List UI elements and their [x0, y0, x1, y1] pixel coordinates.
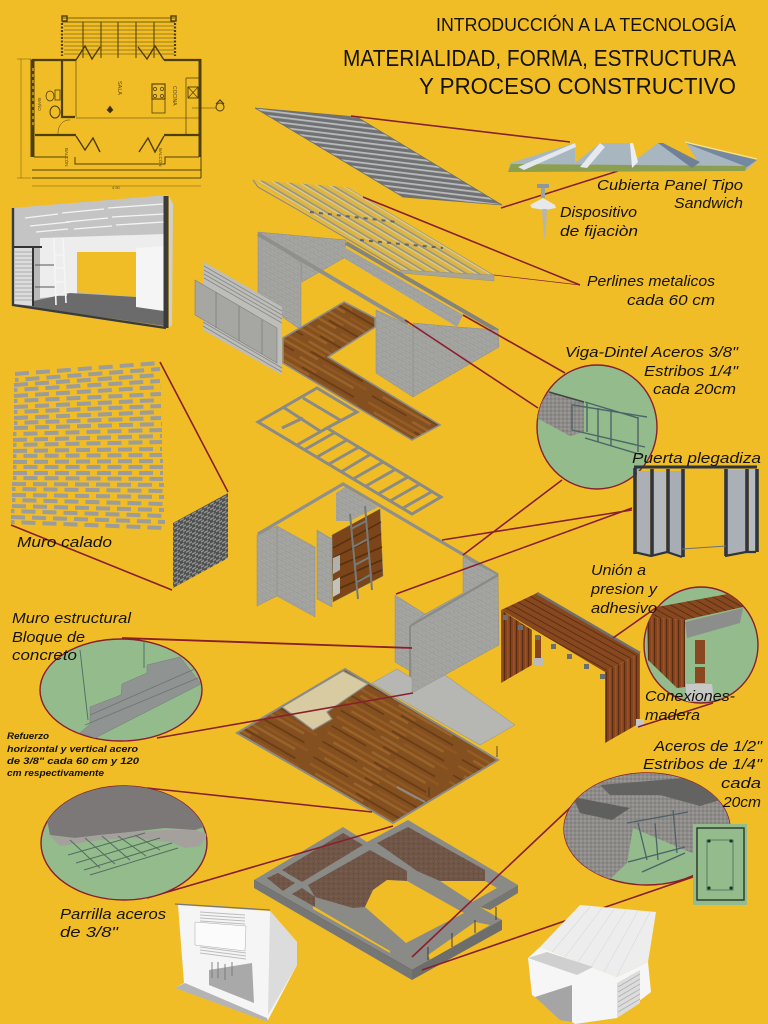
white house back view	[528, 905, 656, 1024]
label: conexiones madera: madera	[645, 707, 700, 724]
foundation openings	[365, 880, 464, 943]
parrilla magnifier	[40, 785, 210, 900]
white house front view	[175, 904, 297, 1022]
label: viga dintel: Viga-Dintel Aceros 3/8"	[565, 344, 739, 361]
label: refuerzo: cm respectivamente	[7, 768, 105, 779]
upper walls with shelves and ladder	[257, 484, 498, 617]
label: muro estructural: concreto	[12, 647, 77, 664]
course title: INTRODUCCIÓN A LA TECNOLOGÍA	[436, 14, 736, 35]
label: cubierta	[597, 177, 743, 212]
label: balcon right: BALCÓN	[158, 148, 164, 167]
conexiones madera magnifier	[644, 587, 758, 703]
main title line 1: MATERIALIDAD, FORMA, ESTRUCTURA	[343, 45, 737, 71]
label: dispositivo de fijacion	[560, 204, 638, 240]
label: conexiones madera	[645, 688, 735, 724]
label: union a presion	[590, 562, 659, 617]
label: perlines: cada 60 cm	[627, 292, 715, 309]
foundation	[254, 820, 518, 980]
foundation top surface	[254, 820, 518, 970]
label: muro calado: Muro calado	[17, 534, 112, 551]
foundation magnifier	[564, 772, 735, 885]
label: puerta plegadiza: Puerta plegadiza	[632, 450, 761, 467]
foundation side faces	[254, 880, 412, 980]
concrete terrace	[372, 669, 515, 745]
label: viga dintel	[565, 344, 739, 398]
label: parrilla: Parrilla aceros	[60, 906, 167, 923]
metal purlins layer	[253, 180, 494, 281]
fixing device	[530, 184, 556, 240]
label: refuerzo: horizontal y vertical acero	[7, 744, 138, 755]
viga dintel magnifier	[537, 365, 657, 489]
label: cubierta: Sandwich	[674, 195, 743, 212]
label: perlines	[587, 273, 716, 309]
roof panel layer	[255, 108, 502, 205]
wood floor L shape	[283, 302, 440, 440]
beam grid	[258, 388, 441, 514]
label: refuerzo: de 3/8" cada 60 cm y 120	[7, 756, 140, 767]
wood floor	[237, 669, 498, 823]
callout lines	[11, 116, 713, 970]
label: cubierta: Cubierta Panel Tipo	[597, 177, 743, 194]
label: muro estructural: Bloque de	[12, 629, 85, 646]
label: viga dintel: Estribos 1/4"	[644, 363, 739, 380]
main title line 2: Y PROCESO CONSTRUCTIVO	[419, 73, 736, 99]
label: muro estructural: Muro estructural	[12, 610, 132, 627]
label: dimension: 4.50	[112, 185, 121, 190]
label: sala: SALA	[116, 81, 122, 95]
timber frame	[501, 593, 644, 743]
label: dispositivo de fijacion: Dispositivo	[560, 204, 637, 221]
label: aceros: Estribos de 1/4"	[643, 756, 763, 773]
label: parrilla	[60, 906, 167, 941]
label: aceros: Aceros de 1/2"	[653, 738, 763, 755]
label: cocina: COCINA	[171, 86, 177, 106]
label: viga dintel: cada 20cm	[653, 381, 736, 398]
label: perlines: Perlines metalicos	[587, 273, 716, 290]
label: union a presion: adhesivo	[591, 600, 657, 617]
label: conexiones madera: Conexiones-	[645, 688, 735, 705]
folding door	[634, 467, 757, 557]
floor plan room labels	[37, 81, 177, 190]
ground floor finishes	[237, 669, 515, 823]
main structural walls	[395, 557, 499, 693]
muro estructural magnifier	[40, 639, 202, 741]
muro calado large detail	[11, 363, 165, 528]
label: refuerzo: Refuerzo	[7, 731, 49, 742]
cream tile floor	[282, 671, 368, 730]
label: refuerzo	[7, 731, 140, 779]
label: muro estructural	[12, 610, 132, 664]
label: union a presion: Unión a	[591, 562, 646, 579]
muro calado small elevation	[173, 493, 228, 588]
roof structure walls and beams	[258, 232, 499, 397]
interior section view	[13, 195, 173, 328]
label: balcon left: BALCÓN	[64, 148, 70, 167]
label: parrilla: de 3/8"	[60, 924, 119, 941]
label: bano: BAÑO	[37, 98, 43, 111]
label: aceros: cada	[721, 775, 761, 792]
floor plan	[17, 16, 224, 186]
sandwich roof panel detail	[508, 142, 757, 172]
label: union a presion: presion y	[590, 581, 659, 598]
title block	[343, 14, 737, 99]
label: aceros: 20cm	[722, 794, 761, 811]
side block wall panel	[195, 262, 282, 375]
soil patches	[267, 827, 485, 908]
label: aceros	[643, 738, 763, 811]
label: dispositivo de fijacion: de fijaciòn	[560, 223, 638, 240]
column section detail	[693, 824, 747, 905]
